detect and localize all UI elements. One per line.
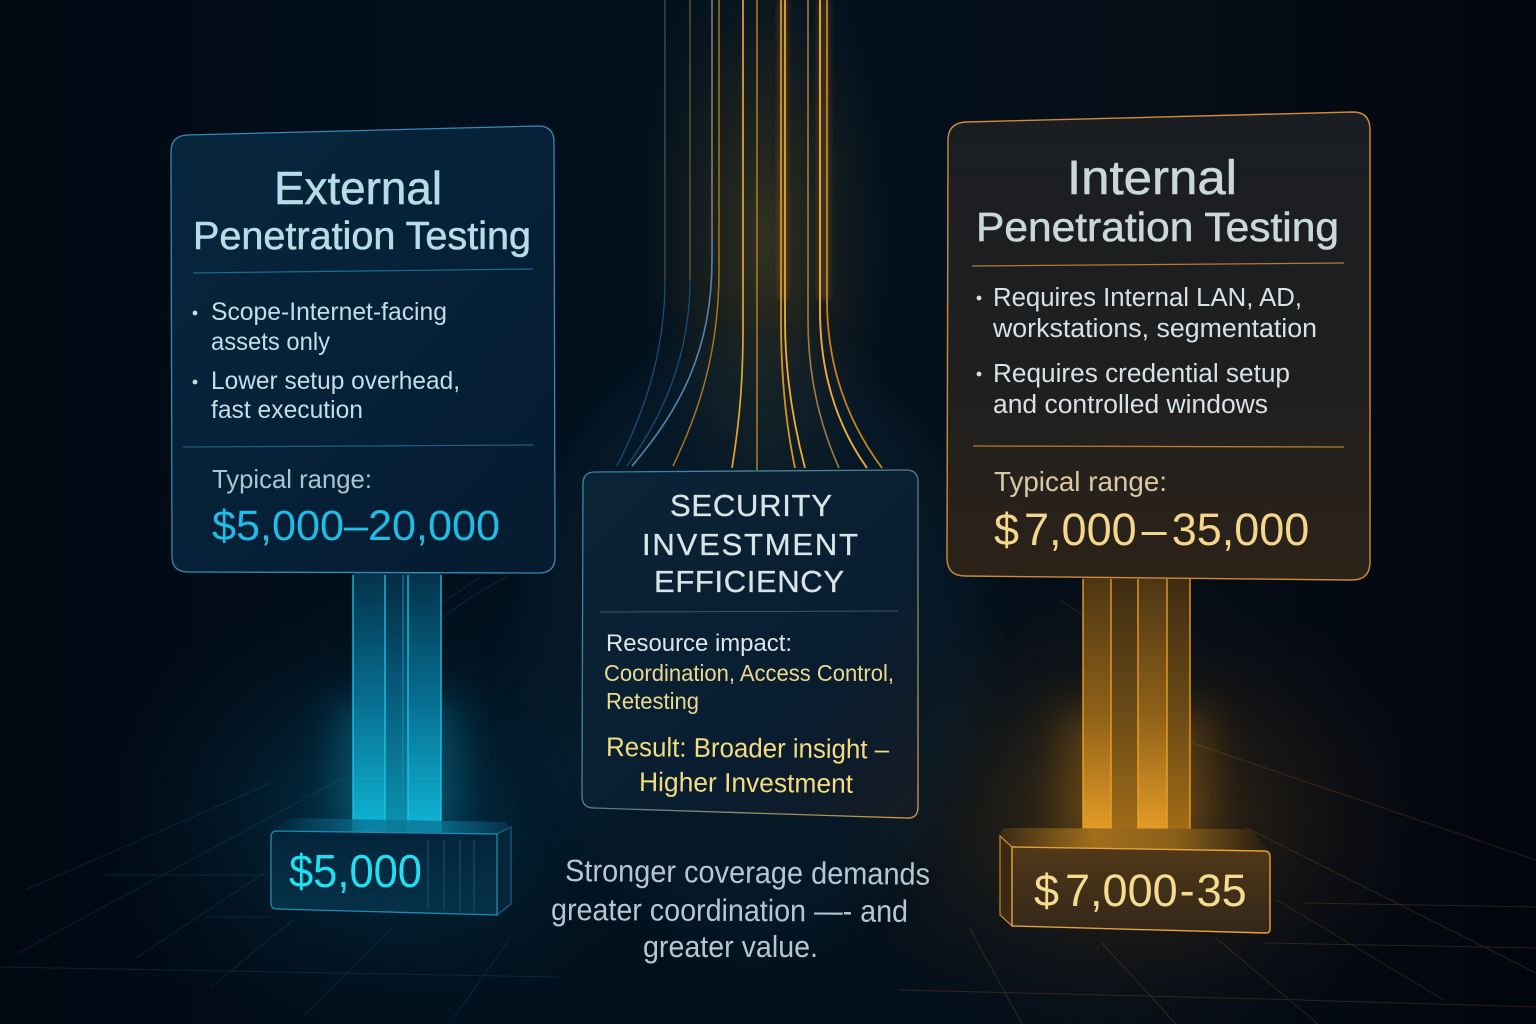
result: Higher Investment	[639, 767, 854, 799]
range value: $5,000–20,000	[212, 502, 500, 550]
heading: INVESTMENT	[642, 527, 858, 562]
resource impact: Resource impact:	[606, 630, 792, 657]
value: $5,000: $5,000	[289, 845, 422, 897]
bullets: fast execution	[211, 396, 363, 424]
floor grid: orange side	[900, 600, 1536, 1024]
resource impact: Retesting	[606, 688, 699, 714]
pillar: external	[335, 573, 459, 832]
bullets: workstations, segmentation	[992, 315, 1317, 343]
bullets: Requires Internal LAN, AD,	[993, 284, 1302, 312]
range value: $7,000–35,000	[994, 504, 1309, 555]
result: Result: Broader insight –	[606, 732, 889, 764]
heading	[642, 488, 858, 599]
value: $7,000-35: $7,000-35	[1034, 865, 1247, 916]
bullets	[977, 284, 1317, 419]
subheading: Penetration Testing	[193, 215, 531, 258]
heading: EFFICIENCY	[654, 564, 844, 599]
resource impact	[604, 630, 894, 714]
range label: Typical range:	[994, 466, 1167, 497]
bullets: Lower setup overhead,	[211, 367, 460, 395]
panel: security investment efficiency	[582, 470, 918, 818]
heading: Internal	[1067, 152, 1237, 205]
panel: external penetration testing	[171, 126, 555, 573]
base block: external	[271, 818, 511, 915]
heading: External	[274, 162, 442, 214]
central light streams	[617, 0, 882, 470]
bullets: Scope-Internet-facing	[211, 298, 447, 326]
pillar: internal	[1060, 578, 1210, 848]
resource impact: Coordination, Access Control,	[604, 660, 894, 686]
subheading: Penetration Testing	[976, 204, 1339, 250]
bullets	[193, 298, 460, 424]
range label: Typical range:	[212, 464, 372, 494]
base block: internal	[1000, 828, 1270, 933]
heading: SECURITY	[670, 488, 832, 523]
bullets: Requires credential setup	[993, 360, 1290, 388]
tagline	[551, 853, 930, 964]
tagline: greater value.	[643, 929, 818, 964]
bullets: and controlled windows	[993, 391, 1268, 419]
tagline: Stronger coverage demands	[565, 853, 930, 892]
result	[606, 732, 889, 799]
tagline: greater coordination —- and	[551, 892, 908, 929]
floor grid: blue side	[0, 577, 560, 1017]
bullets: assets only	[211, 328, 330, 356]
panel: internal penetration testing	[947, 112, 1370, 580]
